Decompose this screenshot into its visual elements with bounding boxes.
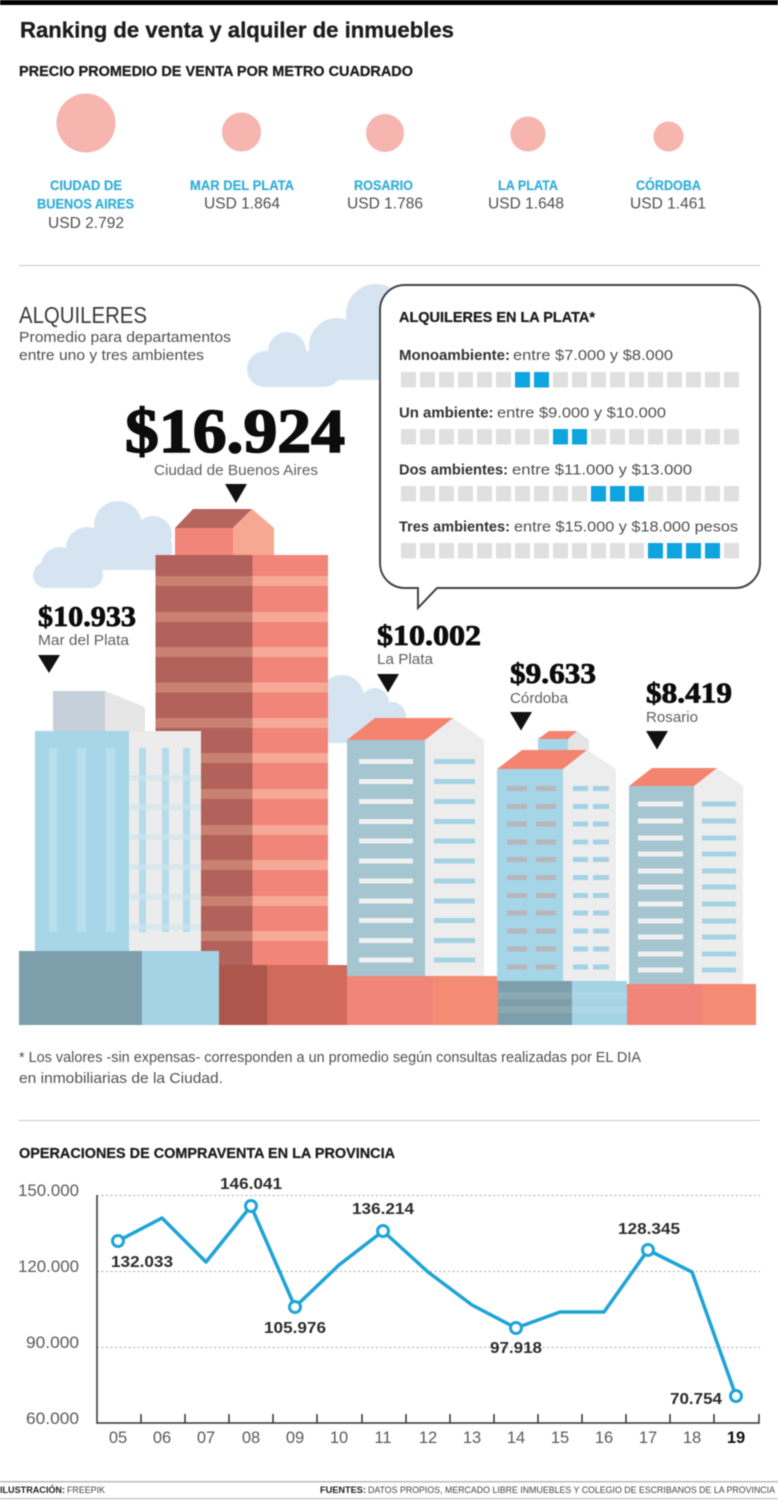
cloud: middle — [320, 675, 406, 743]
footnote: en inmobiliarias de la Ciudad. — [19, 1070, 223, 1087]
footnote: * Los valores -sin expensas- corresponden a un promedio según consultas realizadas por EL DIA — [19, 1049, 641, 1066]
row: Dos ambientes — [399, 462, 739, 502]
bubble: Ciudad de Buenos Aires: CIUDAD DE — [50, 178, 122, 193]
panel: sale price per square metre — [19, 64, 706, 232]
label: Rosario $8.419 — [646, 678, 732, 750]
label: La Plata $10.002 — [377, 621, 481, 692]
label: Rosario $8.419: Rosario — [646, 710, 698, 726]
y axis labels: 60.000 — [26, 1410, 79, 1428]
heading: rents: entre uno y tres ambientes — [19, 347, 204, 364]
bubble: Córdoba: CÓRDOBA — [636, 178, 701, 193]
bubble: Córdoba — [630, 122, 706, 212]
label: La Plata $10.002: La Plata — [377, 652, 434, 668]
bubble: Ciudad de Buenos Aires — [37, 94, 134, 232]
cloud: left — [33, 501, 172, 588]
bubble: Rosario — [347, 114, 423, 212]
footer: credits and sources: DATOS PROPIOS, MERCADO LIBRE INMUEBLES Y COLEGIO DE ESCRIBANOS DE LA PROVINCIA — [368, 1485, 775, 1495]
title: Ranking de venta y alquiler de inmuebles — [20, 18, 454, 42]
label: Rosario $8.419: $8.419 — [646, 678, 732, 710]
value labels: 105.976 — [264, 1320, 326, 1337]
label: Córdoba $9.633 — [510, 659, 596, 730]
y axis labels: 150.000 — [18, 1182, 79, 1200]
bubble: Rosario: ROSARIO — [354, 178, 413, 193]
building: Córdoba — [497, 731, 627, 1025]
row: Dos ambientes: Dos ambientes: — [399, 462, 508, 478]
x axis labels: 05 — [109, 1429, 127, 1447]
bubble: Mar del Plata — [190, 112, 294, 212]
x axis labels: 18 — [683, 1429, 701, 1447]
label: Mar del Plata $10.933: $10.933 — [38, 602, 136, 633]
value labels: 128.345 — [618, 1221, 680, 1238]
x axis labels: 16 — [595, 1429, 613, 1447]
x axis labels: 13 — [463, 1429, 481, 1447]
label: Mar del Plata $10.933: Mar del Plata — [38, 633, 130, 649]
row: Monoambiente: Monoambiente: — [399, 347, 510, 364]
line chart: sales operations — [18, 1176, 760, 1447]
row: Monoambiente — [399, 347, 739, 388]
value labels: 70.754 — [670, 1391, 722, 1408]
y axis labels: 90.000 — [26, 1334, 79, 1352]
footnote — [19, 1049, 641, 1087]
bubble: La Plata: USD 1.648 — [488, 196, 564, 212]
row: Un ambiente — [399, 404, 739, 444]
x axis labels — [109, 1429, 745, 1447]
footer: credits and sources: FUENTES: — [320, 1485, 366, 1495]
heading: sales operations: OPERACIONES DE COMPRAVENTA EN LA PROVINCIA — [19, 1146, 396, 1162]
value labels: 97.918 — [490, 1340, 542, 1357]
x axis labels: 12 — [419, 1429, 437, 1447]
row: Tres ambientes: Tres ambientes: — [399, 518, 510, 536]
callout: rents in La Plata — [380, 285, 760, 608]
label: Ciudad de Buenos Aires $16.924: $16.924 — [125, 398, 345, 466]
y axis labels: 120.000 — [18, 1258, 79, 1276]
label: Ciudad de Buenos Aires $16.924: Ciudad de Buenos Aires — [154, 463, 318, 479]
row: Un ambiente: Un ambiente: — [399, 404, 494, 422]
bubble: Mar del Plata: USD 1.864 — [204, 196, 280, 212]
building: Rosario — [627, 768, 756, 1025]
heading: rents — [19, 302, 231, 364]
value labels: 136.214 — [352, 1201, 414, 1218]
bubble: Córdoba: USD 1.461 — [630, 196, 706, 212]
x axis labels: 19 — [727, 1429, 745, 1447]
bubble: Rosario: USD 1.786 — [347, 196, 423, 212]
value labels: 132.033 — [111, 1254, 173, 1271]
label: La Plata $10.002: $10.002 — [377, 621, 481, 652]
label: Mar del Plata $10.933 — [38, 602, 136, 673]
label: Córdoba $9.633: $9.633 — [510, 659, 596, 690]
cloud: top — [247, 284, 406, 387]
bubble: La Plata — [488, 116, 564, 212]
row: Dos ambientes: entre $11.000 y $13.000 — [512, 462, 692, 478]
row: Tres ambientes: entre $15.000 y $18.000 pesos — [514, 518, 738, 536]
x axis labels: 14 — [507, 1429, 525, 1447]
data line — [118, 1206, 736, 1396]
bubble: La Plata: LA PLATA — [498, 178, 558, 193]
x axis labels: 06 — [153, 1429, 171, 1447]
x axis labels: 15 — [551, 1429, 569, 1447]
callout heading: ALQUILERES EN LA PLATA* — [399, 310, 595, 326]
footer: credits and sources: ILUSTRACIÓN: — [0, 1484, 65, 1495]
x axis labels: 08 — [242, 1429, 260, 1447]
y axis labels — [18, 1182, 79, 1428]
data markers — [112, 1200, 742, 1402]
bubble: Ciudad de Buenos Aires: USD 2.792 — [48, 215, 124, 232]
x axis labels: 11 — [374, 1429, 392, 1447]
x axis labels: 10 — [330, 1429, 348, 1447]
row: Monoambiente: entre $7.000 y $8.000 — [513, 347, 673, 364]
value labels — [111, 1176, 722, 1408]
heading: rents: Promedio para departamentos — [19, 329, 231, 346]
label: Ciudad de Buenos Aires $16.924 — [125, 398, 345, 503]
footer: credits and sources — [0, 1484, 775, 1495]
heading: sale price: PRECIO PROMEDIO DE VENTA POR METRO CUADRADO — [19, 64, 413, 80]
x axis labels: 09 — [286, 1429, 304, 1447]
label: Córdoba $9.633: Córdoba — [510, 691, 569, 707]
value labels: 146.041 — [220, 1176, 282, 1193]
footer: credits and sources: FREEPIK — [67, 1485, 105, 1495]
building: Ciudad de Buenos Aires — [156, 509, 347, 1025]
building: La Plata — [347, 718, 498, 1025]
bubble: Ciudad de Buenos Aires: BUENOS AIRES — [37, 196, 134, 212]
row: Un ambiente: entre $9.000 y $10.000 — [497, 404, 666, 422]
x axis labels: 07 — [197, 1429, 215, 1447]
x axis labels: 17 — [639, 1429, 657, 1447]
building: Mar del Plata — [19, 691, 219, 1025]
bubble: Mar del Plata: MAR DEL PLATA — [190, 178, 294, 193]
heading: rents: ALQUILERES — [19, 302, 147, 328]
row: Tres ambientes — [399, 518, 739, 558]
